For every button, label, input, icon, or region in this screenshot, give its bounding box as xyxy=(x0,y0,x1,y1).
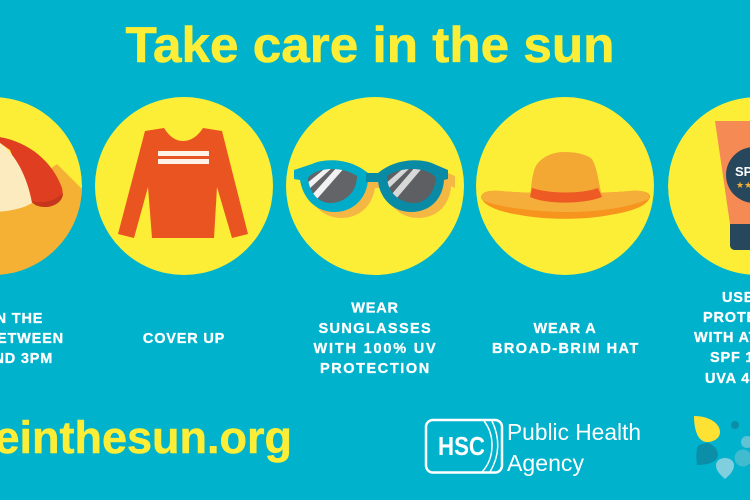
icon: broad-brim hat xyxy=(476,97,654,275)
icon: long-sleeved top xyxy=(95,97,273,275)
caption: wear sunglasses: SUNGLASSES xyxy=(318,321,432,337)
logo: droplet mark xyxy=(694,416,750,479)
icon: sun shade cap xyxy=(0,97,84,280)
logo: HSC Public Health Agency: Public Health xyxy=(507,419,641,445)
caption: stay in the shade xyxy=(0,311,64,367)
caption: wear sunglasses: WEAR xyxy=(351,300,399,316)
logo: HSC Public Health Agency: Agency xyxy=(507,450,584,476)
caption: wear a broad-brim hat xyxy=(492,321,639,357)
title: Take care in the sun xyxy=(126,17,614,73)
logo: HSC Public Health Agency xyxy=(426,419,641,476)
logo: HSC Public Health Agency: HSC xyxy=(438,431,485,461)
caption: wear a broad-brim hat: WEAR A xyxy=(533,321,597,337)
caption: wear sunglasses xyxy=(314,300,436,377)
caption: cover up: COVER UP xyxy=(143,331,225,347)
caption: wear sunglasses: PROTECTION xyxy=(320,361,430,377)
caption: use protection xyxy=(694,290,750,387)
icon: sunscreen tube xyxy=(668,97,750,275)
caption: wear sunglasses: WITH 100% UV xyxy=(314,341,436,357)
caption: wear a broad-brim hat: BROAD-BRIM HAT xyxy=(492,341,639,357)
icon: sunglasses xyxy=(286,97,464,275)
